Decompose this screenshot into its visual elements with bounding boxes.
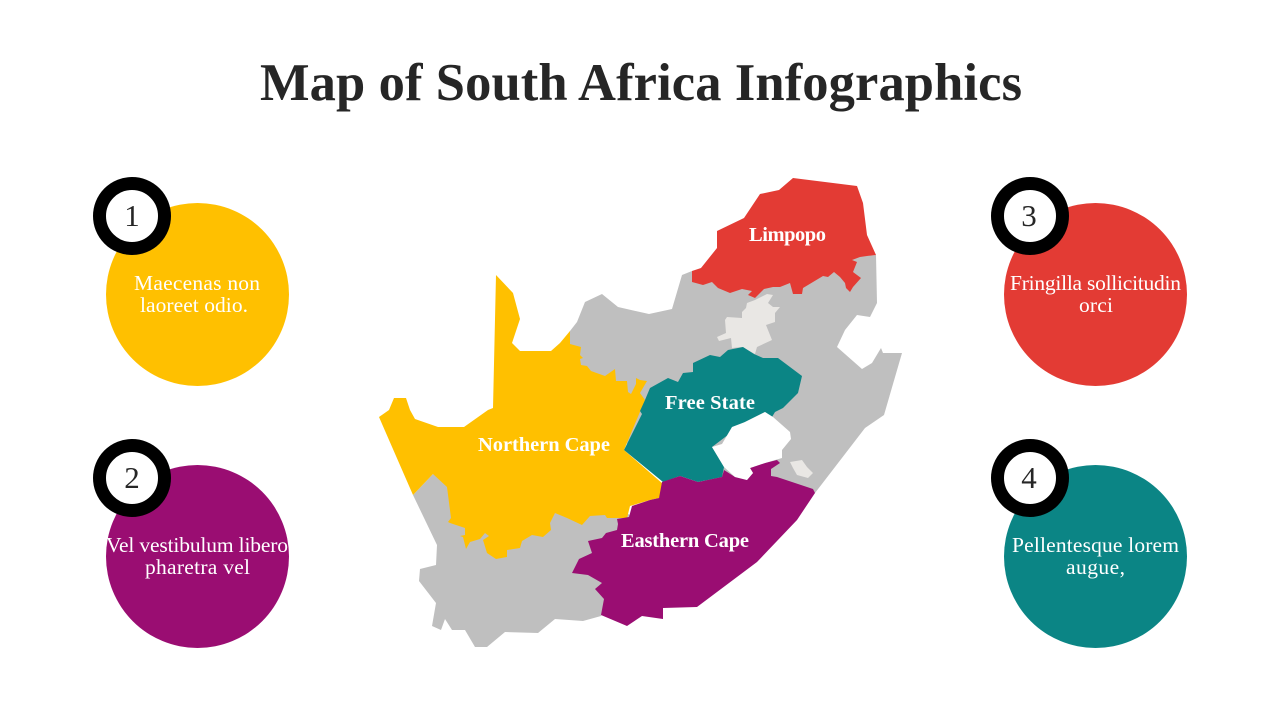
- panel: item 3: 3: [1021, 198, 1037, 233]
- region: Free State: [624, 347, 802, 482]
- label: Limpopo: Limpopo: [749, 224, 826, 246]
- panel: item 1: [100, 184, 289, 386]
- region: Limpopo: [692, 178, 876, 298]
- title: Map of South Africa Infographics: [260, 54, 1022, 112]
- panel: item 4: 4: [1021, 460, 1037, 495]
- region: Northern Cape: [379, 275, 663, 559]
- region: north-east grey provinces: [560, 255, 902, 493]
- panel: item 1: 1: [124, 198, 140, 233]
- panel: item 2: pharetra vel: [145, 555, 250, 579]
- panel: item 2: Vel vestibulum libero: [106, 533, 288, 557]
- region: Lesotho: [712, 412, 791, 480]
- panel: item 4: [998, 446, 1187, 648]
- panel: item 1: laoreet odio.: [140, 293, 248, 317]
- panel: item 3: Fringilla sollicitudin: [1010, 271, 1181, 295]
- label: Free State: Free State: [665, 392, 755, 414]
- region: Durban patch: [790, 460, 813, 478]
- panel: item 3: [998, 184, 1187, 386]
- map of South Africa: [379, 178, 902, 647]
- region: south-west grey provinces: [413, 474, 640, 647]
- panel: item 2: 2: [124, 460, 140, 495]
- panel: item 3: orci: [1079, 293, 1113, 317]
- label: Eastern Cape: Easthern Cape: [621, 530, 749, 552]
- panel: item 4: Pellentesque lorem: [1012, 533, 1179, 557]
- panel: item 4: augue,: [1066, 555, 1125, 579]
- panel: item 1: Maecenas non: [134, 271, 260, 295]
- region: Eastern Cape: [572, 460, 815, 626]
- label: Northern Cape: Northern Cape: [478, 434, 610, 456]
- panel: item 2: [100, 446, 289, 648]
- region: Gauteng: [717, 294, 780, 354]
